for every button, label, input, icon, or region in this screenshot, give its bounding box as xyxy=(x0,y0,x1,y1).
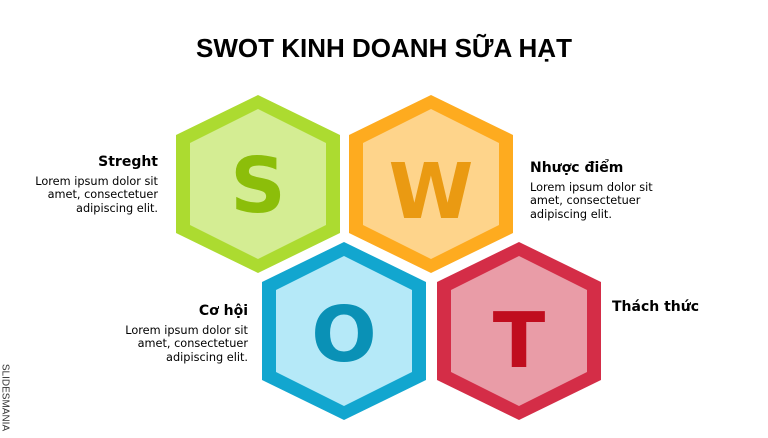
hexagon: O: O xyxy=(311,291,377,380)
text block: Streght xyxy=(35,154,158,215)
hexagon: S xyxy=(176,95,340,273)
text block: Cơ hội: amet, consectetuer xyxy=(138,337,248,350)
text block: Streght: adipiscing elit. xyxy=(76,202,158,215)
text block: Cơ hội: adipiscing elit. xyxy=(166,351,248,364)
text block: Cơ hội: Lorem ipsum dolor sit xyxy=(125,324,248,337)
hexagon: T xyxy=(437,242,601,420)
text block: Nhược điểm: Nhược điểm xyxy=(530,160,623,176)
hexagon: W xyxy=(349,95,513,273)
text block: Streght: Lorem ipsum dolor sit xyxy=(35,175,158,188)
text block: Streght: Streght xyxy=(98,154,158,170)
hexagon: O xyxy=(262,242,426,420)
text block: Streght: amet, consectetuer xyxy=(48,188,158,201)
hexagon: T: T xyxy=(493,297,546,386)
text block: Nhược điểm: Lorem ipsum dolor sit xyxy=(530,181,653,194)
text block: Thách thức: Thách thức xyxy=(612,299,699,315)
hexagon: S: S xyxy=(230,142,286,231)
text block: Nhược điểm xyxy=(530,159,653,221)
text block: Nhược điểm: adipiscing elit. xyxy=(530,208,612,221)
title: SWOT KINH DOANH SỮA HẠT xyxy=(196,33,572,63)
hexagon: W: W xyxy=(389,148,473,237)
text block: Cơ hội xyxy=(125,303,248,364)
text block: Cơ hội: Cơ hội xyxy=(199,303,248,319)
text block: Nhược điểm: amet, consectetuer xyxy=(530,194,640,207)
